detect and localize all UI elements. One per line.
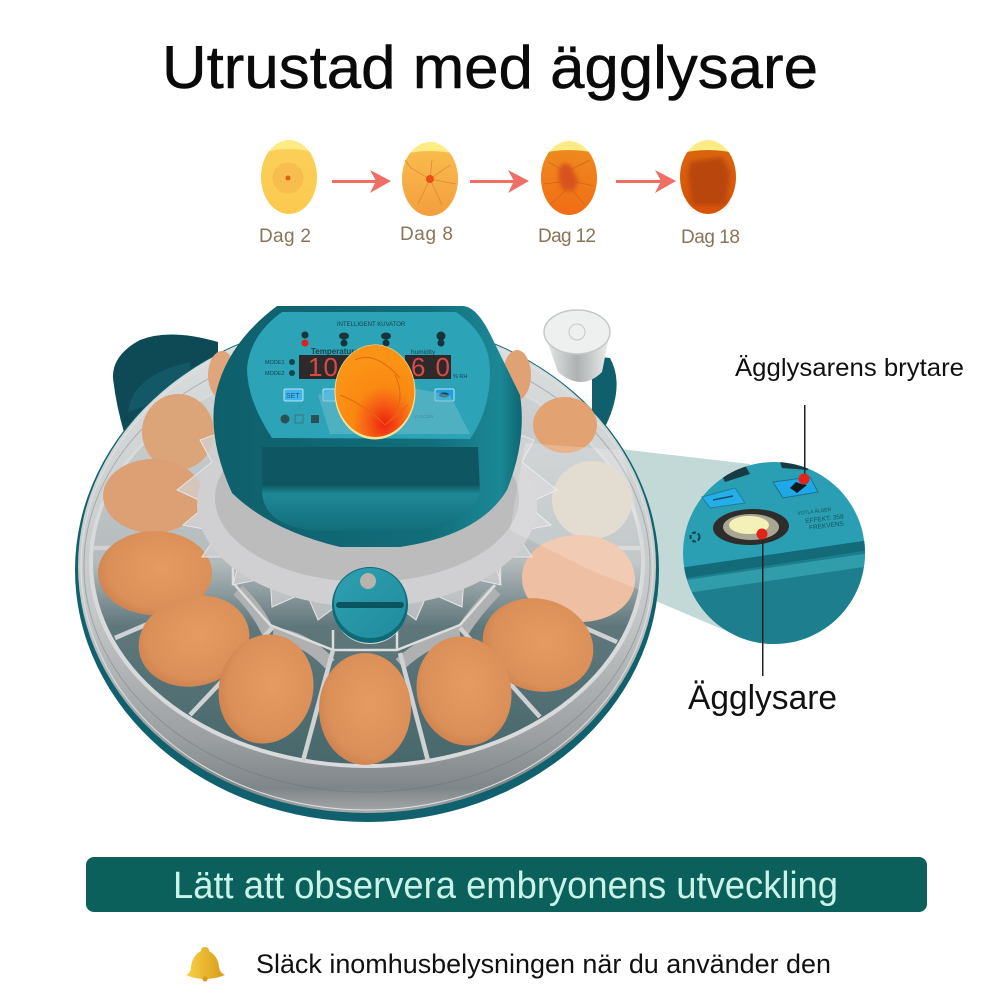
base [75, 318, 659, 822]
control unit [213, 306, 522, 547]
egg: day 8 [402, 142, 458, 216]
clear rim [78, 319, 656, 813]
light button [435, 389, 454, 401]
arrow 1 [332, 170, 391, 193]
% RH label: % RH [453, 374, 467, 380]
label: Dag 8: Dag 8 [400, 224, 453, 245]
glow beneath egg [318, 388, 470, 434]
recycle mark [690, 532, 700, 542]
certification marks [280, 414, 319, 424]
plus button [323, 389, 343, 401]
callout: candling lamp [688, 528, 837, 717]
turning knob [332, 567, 408, 644]
temperature display: 10 [308, 352, 338, 382]
set button: SET [286, 393, 300, 400]
humidity display: 60 [411, 352, 450, 382]
status icons [302, 332, 446, 346]
banner [86, 857, 927, 912]
humidity heading: humidity [411, 349, 436, 356]
callout: lamp switch: Ägglysarens brytare [735, 354, 964, 382]
front face and scoop [262, 447, 480, 531]
callout: candling lamp: Ägglysare [688, 679, 837, 717]
candling lamp [712, 508, 790, 546]
mode labels [265, 359, 295, 377]
specifications: V: DC12V [414, 414, 434, 419]
specification text [797, 504, 845, 533]
candling button [773, 477, 818, 498]
panel [247, 312, 490, 439]
magnified detail circle [683, 462, 865, 644]
temperature display [299, 352, 369, 382]
mode labels: MODE2 [265, 371, 285, 377]
specification text: FREKVENS [809, 520, 845, 532]
note [186, 947, 831, 982]
tray floor [93, 360, 641, 764]
magnifier cone [620, 449, 750, 636]
specification text: EFFEKT: 358 [805, 513, 844, 525]
mode labels: MODE1 [265, 360, 285, 366]
label: Dag 2: Dag 2 [259, 226, 311, 247]
eggs [98, 350, 635, 765]
title: Utrustad med ägglysare [162, 34, 818, 101]
top marks [720, 462, 810, 482]
air vent valve [544, 310, 610, 382]
note text: Släck inomhusbelysningen när du använder den [256, 949, 831, 979]
set button [284, 389, 303, 401]
egg: day 18 [680, 140, 736, 214]
minus button [702, 488, 745, 508]
candled egg overlay [334, 344, 416, 440]
front edge of unit [684, 541, 865, 644]
tray walls [233, 565, 500, 664]
embryo development sequence [255, 140, 742, 248]
tray ring [89, 358, 645, 768]
label: Dag 18: Dag 18 [681, 227, 740, 248]
dome reflection [510, 443, 641, 590]
icon: bell [186, 947, 225, 982]
specification text: VOTLA ÄLDER [797, 506, 832, 517]
turning gear [177, 380, 557, 625]
callout: lamp switch [735, 354, 964, 484]
egg incubator [75, 306, 659, 822]
banner: Lätt att observera embryonens utveckling [173, 865, 838, 907]
temperature heading: Temperature [311, 347, 359, 356]
tray dividers [93, 548, 640, 761]
egg: day 2 [261, 140, 317, 214]
water tab left [113, 334, 218, 432]
panel heading: INTELLIGENT KUVATOR [337, 322, 406, 328]
rear tab right [592, 356, 617, 425]
arrow 3 [616, 170, 676, 193]
egg: day 12 [541, 141, 597, 215]
arrow 2 [470, 170, 529, 193]
label: Dag 12: Dag 12 [538, 226, 596, 247]
